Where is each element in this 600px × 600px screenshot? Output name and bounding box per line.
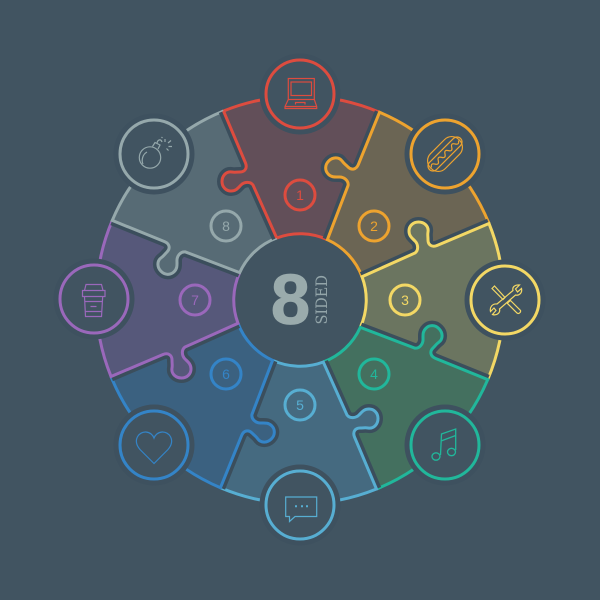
puzzle piece 2: orange xyxy=(324,110,490,278)
number badge 6 xyxy=(211,359,241,389)
number badge 6: 6 xyxy=(222,366,230,382)
icon circle 5: speech bubble xyxy=(262,467,338,543)
number badge 8 xyxy=(211,211,241,241)
number badge 7 xyxy=(180,285,210,315)
icon circle 2: hot dog xyxy=(407,116,483,192)
puzzle piece 8: grey xyxy=(110,110,278,276)
label: SIDED: SIDED xyxy=(313,275,331,324)
puzzle piece 3: yellow xyxy=(360,222,504,380)
number badge 5: 5 xyxy=(296,397,304,413)
icon circle 4: music notes xyxy=(407,407,483,483)
number badge 8: 8 xyxy=(222,218,230,234)
edge shadows between pieces xyxy=(111,111,489,489)
puzzle piece 6: blue xyxy=(110,323,276,490)
number badge 2: 2 xyxy=(370,218,378,234)
puzzle piece 5: light blue xyxy=(220,360,378,504)
number badge 7: 7 xyxy=(191,292,199,308)
icon circle 8: bomb xyxy=(116,116,192,192)
number badge 2 xyxy=(359,211,389,241)
icon circle 3: wrench and screwdriver xyxy=(467,262,543,338)
number badge 1: 1 xyxy=(296,187,304,203)
number badge 1 xyxy=(285,180,315,210)
big numeral 8: 8 xyxy=(271,261,310,340)
puzzle piece 7: purple xyxy=(96,220,240,378)
number badge 3 xyxy=(390,285,420,315)
icon circle 6: heart xyxy=(116,407,192,483)
icon circle 1: laptop xyxy=(262,56,338,132)
number badge 4: 4 xyxy=(370,366,378,382)
icon circle 7: coffee cup xyxy=(56,261,132,337)
number badge 5 xyxy=(285,390,315,420)
number badge 3: 3 xyxy=(401,292,409,308)
puzzle piece 4: teal xyxy=(323,324,490,490)
puzzle piece 1: red xyxy=(222,96,380,240)
number badge 4 xyxy=(359,359,389,389)
